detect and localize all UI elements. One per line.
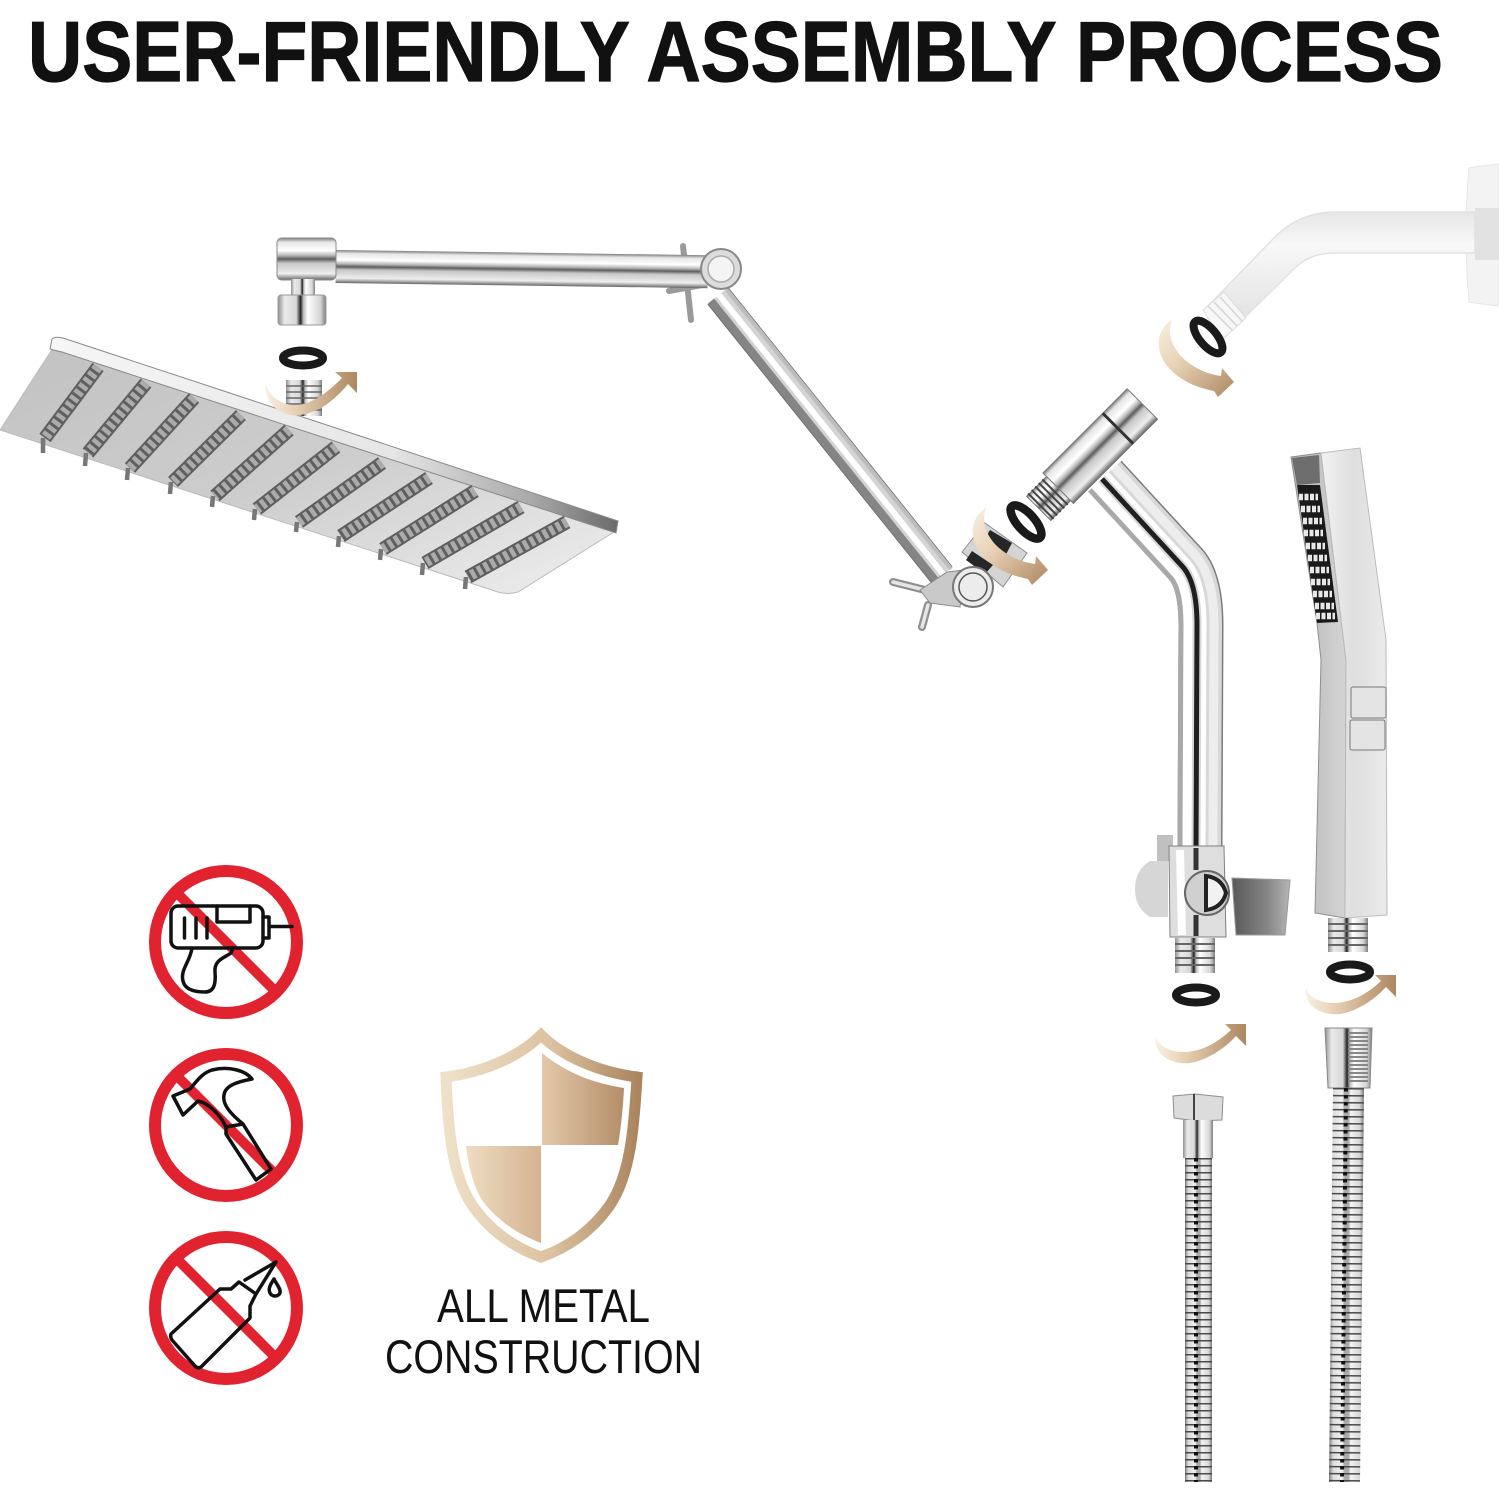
spray face with nozzle rows <box>1297 485 1338 623</box>
washer: wall arm <box>1189 316 1227 358</box>
top pivot wing knob <box>669 246 702 320</box>
adjustable extension arm <box>277 238 951 580</box>
ghost wall shower arm <box>1203 164 1499 340</box>
arrow: hand shower to hose <box>1306 975 1396 1014</box>
icon: no hammer <box>155 1054 297 1196</box>
bracket with holder knob <box>1135 835 1290 937</box>
washer: shower head <box>283 350 323 366</box>
icon: shield <box>446 1035 637 1257</box>
washer: arm to diverter <box>1006 501 1046 543</box>
thread: shower head <box>286 380 322 416</box>
washer: hand shower <box>1330 964 1370 980</box>
diverter riser tube <box>1090 467 1214 850</box>
hose: right <box>1325 1028 1372 1482</box>
square rain shower head <box>0 337 618 594</box>
arrow: bracket to hose <box>1156 1024 1246 1063</box>
arrow: arm to diverter connection <box>973 508 1048 585</box>
lower swivel joint <box>893 523 1027 627</box>
swivel ball <box>278 279 326 325</box>
arrow: wall arm connection <box>1159 320 1234 397</box>
top pivot joint <box>701 249 741 289</box>
hose: left <box>1173 1094 1223 1482</box>
icon: no drill <box>155 871 297 1013</box>
all metal construction label: CONSTRUCTION <box>385 1330 702 1383</box>
thread: hand shower <box>1328 918 1368 952</box>
thread: bracket <box>1175 938 1215 973</box>
all metal construction label <box>385 1279 702 1383</box>
icon: no glue <box>155 1237 297 1379</box>
diverter T fitting <box>1023 389 1158 523</box>
nozzle rows <box>45 367 567 577</box>
all metal construction label: ALL METAL <box>437 1279 650 1332</box>
switch button <box>1350 687 1386 750</box>
hand shower <box>1291 448 1387 918</box>
arrow: shower head connection <box>266 372 357 415</box>
washer: bracket <box>1176 988 1216 1002</box>
